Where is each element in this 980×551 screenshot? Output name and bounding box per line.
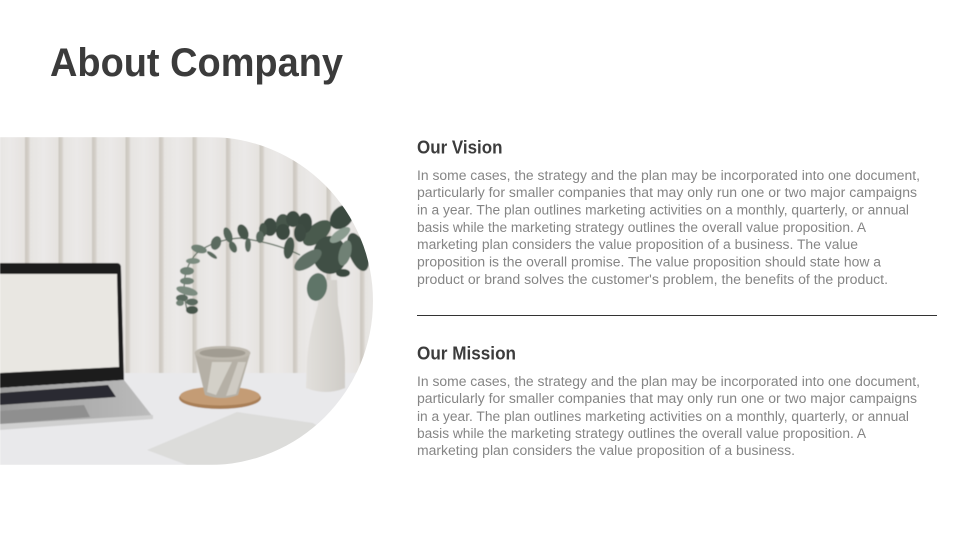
slide [0,47,937,465]
coaster [179,386,261,409]
table [0,373,380,465]
text block: mission: in a year. The plan outlines marketing activities on a monthly, quarterly, or annual [417,409,909,424]
photo: desk with laptop, cup and plant [0,137,380,465]
text block: mission: particularly for smaller companies that may only run one or two major campaigns [417,391,917,406]
eucalyptus stem [184,238,300,310]
heading: our mission: Our Mission [417,342,516,364]
eucalyptus leaves [175,200,373,314]
title: About Company [50,41,344,85]
text block: vision: proposition is the overall promise. The value proposition should state how a [417,254,882,270]
text block: vision: basis while the marketing strategy outlines the overall value proposition. A [417,220,866,235]
text block: mission: basis while the marketing strategy outlines the overall value proposition. A [417,426,866,441]
text block: vision: in a year. The plan outlines marketing activities on a monthly, quarterly, or annual [417,202,909,218]
heading: our vision: Our Vision [417,136,502,158]
tablet on table [148,412,316,465]
text block: vision: product or brand solves the customer's problem, the benefits of the product. [417,272,888,287]
text block: vision [417,168,920,287]
vase [306,280,345,392]
text block: vision: marketing plan considers the value proposition of a business. The value [417,237,858,252]
cup [194,346,250,398]
text block: mission: marketing plan considers the value proposition of a business. [417,443,795,458]
laptop [0,263,153,430]
text block: vision: particularly for smaller companies that may only run one or two major campaigns [417,185,917,200]
text block: mission [417,374,920,458]
wall with vertical slats [0,137,380,375]
text block: mission: In some cases, the strategy and the plan may be incorporated into one document, [417,374,920,389]
text block: vision: In some cases, the strategy and the plan may be incorporated into one document, [417,168,920,183]
